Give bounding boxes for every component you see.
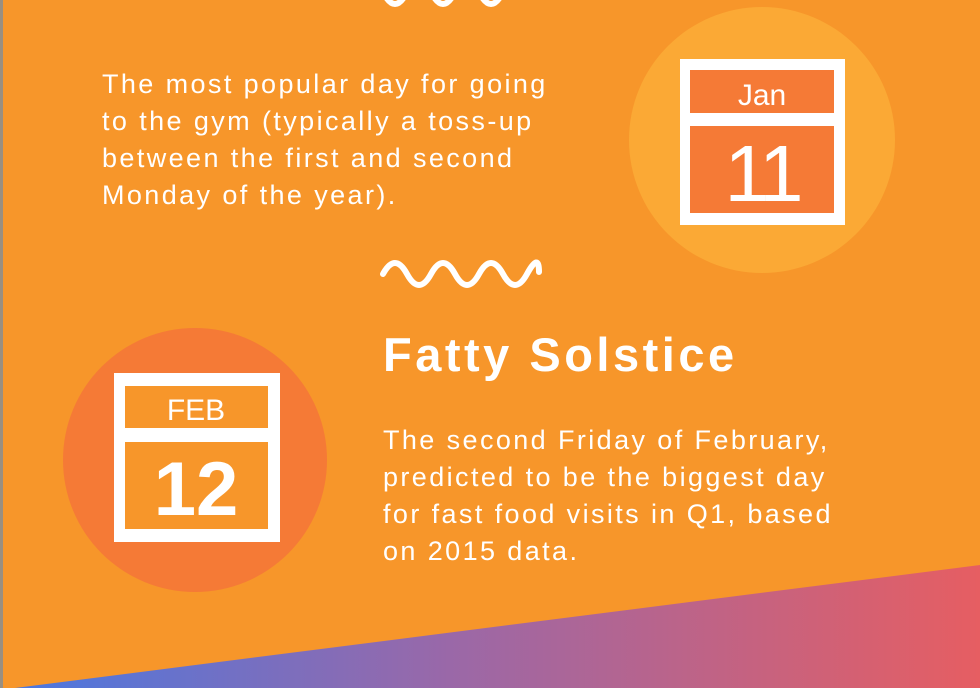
icon: Feb 12 calendar: FEB bbox=[167, 394, 225, 427]
text: gym day description: The most popular day for going bbox=[102, 69, 548, 99]
icon: Feb 12 calendar bbox=[63, 328, 327, 592]
text: gym day description: Monday of the year). bbox=[102, 180, 398, 210]
icon: Jan 11 calendar: 11 bbox=[724, 129, 800, 218]
heading: Fatty Solstice: Fatty Solstice bbox=[383, 328, 738, 381]
text: Fatty Solstice description: predicted to be the biggest day bbox=[383, 462, 827, 492]
text: Fatty Solstice description: for fast food visits in Q1, based bbox=[383, 499, 833, 529]
icon: Feb 12 calendar: 12 bbox=[154, 447, 238, 532]
wave: top bbox=[383, 0, 527, 4]
icon: Jan 11 calendar bbox=[629, 7, 895, 273]
text: gym day description: to the gym (typically a toss-up bbox=[102, 106, 534, 136]
text: Fatty Solstice description bbox=[383, 425, 833, 566]
icon: Jan 11 calendar: Jan bbox=[738, 79, 786, 112]
wave: divider bbox=[383, 262, 539, 285]
text: Fatty Solstice description: on 2015 data. bbox=[383, 536, 579, 566]
text: Fatty Solstice description: The second Friday of February, bbox=[383, 425, 830, 455]
text: gym day description bbox=[102, 69, 548, 210]
text: gym day description: between the first and second bbox=[102, 143, 514, 173]
gradient band bbox=[15, 565, 980, 688]
